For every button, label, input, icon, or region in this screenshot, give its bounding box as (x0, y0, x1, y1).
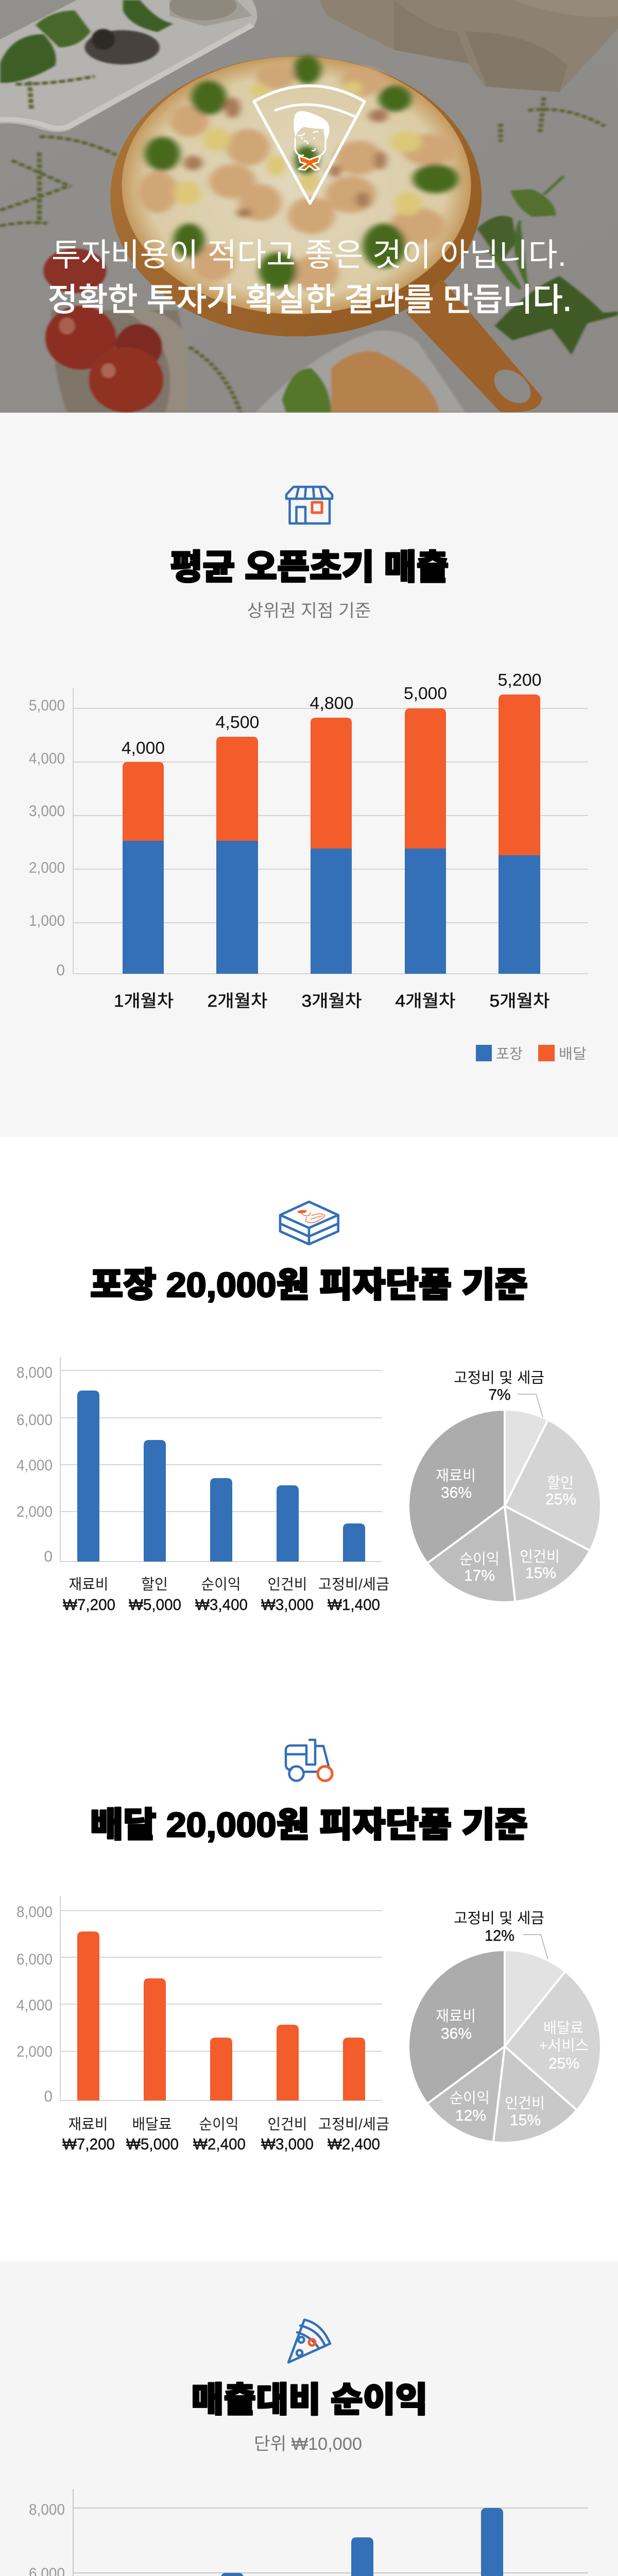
icon: delivery scooter (286, 1740, 332, 1781)
stacked bar chart: 1개월차 (114, 991, 174, 1010)
pie chart: 할인 (547, 1475, 574, 1492)
stacked bar chart: 2,000 (29, 859, 65, 876)
legend: 포장 (496, 1046, 523, 1062)
bar chart: ₩2,400 (193, 2135, 246, 2153)
panel: net profit vs sales (0, 2261, 618, 2576)
bar chart: ₩3,000 (261, 2135, 314, 2153)
stacked bar chart: 0 (56, 962, 65, 979)
pie chart: 12% (455, 2107, 486, 2124)
panel: average opening sales (0, 413, 618, 1137)
pie chart: +서비스 (539, 2038, 589, 2054)
stacked bar chart: 3,000 (29, 803, 65, 820)
bar chart (16, 1357, 389, 1614)
bar chart: ₩1,400 (328, 1596, 380, 1614)
stacked bar chart: 4,500 (215, 713, 260, 732)
bar chart: 고정비/세금 (318, 1577, 389, 1593)
bar chart: ₩7,200 (63, 1596, 115, 1614)
panel: delivery per pizza (16, 1738, 600, 2153)
panel: takeout per pizza (16, 1200, 600, 1614)
stacked bar chart: 3개월차 (302, 991, 362, 1010)
pie chart: 25% (548, 2055, 579, 2072)
stacked bar chart: 4,000 (122, 738, 165, 757)
grouped bar chart: 8,000 (29, 2501, 65, 2518)
bar chart: 순이익 (199, 2116, 239, 2133)
heading: 평균 오픈초기 매출 (170, 548, 449, 587)
bar chart: 6,000 (16, 1951, 53, 1968)
pie chart: 재료비 (436, 2008, 476, 2025)
stacked bar chart: 5,200 (497, 670, 542, 689)
bar chart: ₩2,400 (328, 2135, 380, 2153)
pie chart: 순이익 (459, 1551, 500, 1568)
pie chart: 7% (488, 1386, 511, 1403)
bar chart: 2,000 (16, 1503, 53, 1520)
bar chart: ₩5,000 (126, 2135, 179, 2153)
stacked bar chart (29, 670, 588, 1010)
pie chart: 인건비 (505, 2095, 545, 2112)
stacked bar chart: 5,000 (29, 697, 65, 714)
stacked bar chart: 5개월차 (489, 991, 550, 1010)
bar chart: 8,000 (16, 1904, 53, 1921)
pie chart: 재료비 (436, 1468, 476, 1484)
bar chart: 인건비 (268, 2116, 307, 2133)
legend: 배달 (559, 1046, 587, 1062)
grouped bar chart (29, 2489, 588, 2576)
heading: 배달 20,000원 피자단품 기준 (90, 1806, 528, 1844)
heading: 포장 20,000원 피자단품 기준 (90, 1266, 528, 1304)
bar chart: 0 (44, 2088, 53, 2105)
subheading: 상위권 지점 기준 (247, 601, 371, 621)
hero headline (48, 238, 572, 318)
bar chart: ₩7,200 (62, 2135, 115, 2153)
stacked bar chart: 4개월차 (396, 991, 455, 1010)
pie chart: 12% (485, 1927, 514, 1944)
hero headline: 투자비용이 적다고 좋은 것이 아닙니다. (52, 238, 566, 273)
stacked bar chart: 1,000 (29, 912, 65, 929)
pie chart: 순이익 (450, 2090, 490, 2107)
bar chart: 6,000 (16, 1412, 53, 1429)
pie chart: 고정비 및 세금 (454, 1910, 544, 1927)
pie chart: 17% (464, 1567, 495, 1584)
stacked bar chart: 5,000 (404, 684, 447, 703)
bar chart: ₩3,400 (195, 1596, 248, 1614)
hero headline: 정확한 투자가 확실한 결과를 만듭니다. (48, 282, 572, 318)
stacked bar chart: 4,800 (310, 693, 353, 713)
icon: pizza slice (288, 2320, 330, 2363)
bar chart: 0 (44, 1548, 53, 1565)
subheading: 단위 ₩10,000 (254, 2434, 362, 2454)
icon: pizza box (280, 1202, 338, 1244)
bar chart (16, 1896, 389, 2153)
stacked bar chart: 4,000 (29, 750, 65, 767)
bar chart: 배달료 (132, 2116, 172, 2133)
pie chart: 배달료 (543, 2020, 583, 2037)
pie chart: 36% (441, 2025, 472, 2042)
pie chart: 인건비 (520, 1549, 560, 1565)
bar chart: 8,000 (16, 1364, 53, 1381)
bar chart: 순이익 (201, 1577, 241, 1593)
pie chart (408, 1910, 601, 2143)
bar chart: 4,000 (16, 1457, 53, 1474)
bar chart: 할인 (141, 1576, 168, 1593)
bar chart: 고정비/세금 (318, 2116, 389, 2133)
pie chart: 고정비 및 세금 (454, 1370, 544, 1386)
pie chart: 36% (441, 1484, 472, 1501)
pie chart: 25% (545, 1491, 576, 1508)
bar chart: 재료비 (69, 1577, 108, 1593)
bar chart: ₩5,000 (129, 1596, 181, 1614)
heading: 매출대비 순이익 (192, 2381, 427, 2419)
pizza photo background (0, 0, 618, 413)
bar chart: 4,000 (16, 1997, 53, 2014)
bar chart: 2,000 (16, 2043, 53, 2060)
pie chart: 15% (510, 2112, 541, 2129)
pie chart (408, 1370, 601, 1602)
bar chart: ₩3,000 (261, 1596, 314, 1614)
bar chart: 인건비 (268, 1577, 307, 1593)
icon: store (286, 487, 332, 523)
logo: pizza slice chef (254, 86, 365, 204)
pie chart: 15% (525, 1565, 556, 1582)
hero photo section (0, 0, 618, 413)
legend (476, 1045, 587, 1062)
bar chart: 재료비 (68, 2116, 108, 2133)
stacked bar chart: 2개월차 (207, 991, 268, 1010)
